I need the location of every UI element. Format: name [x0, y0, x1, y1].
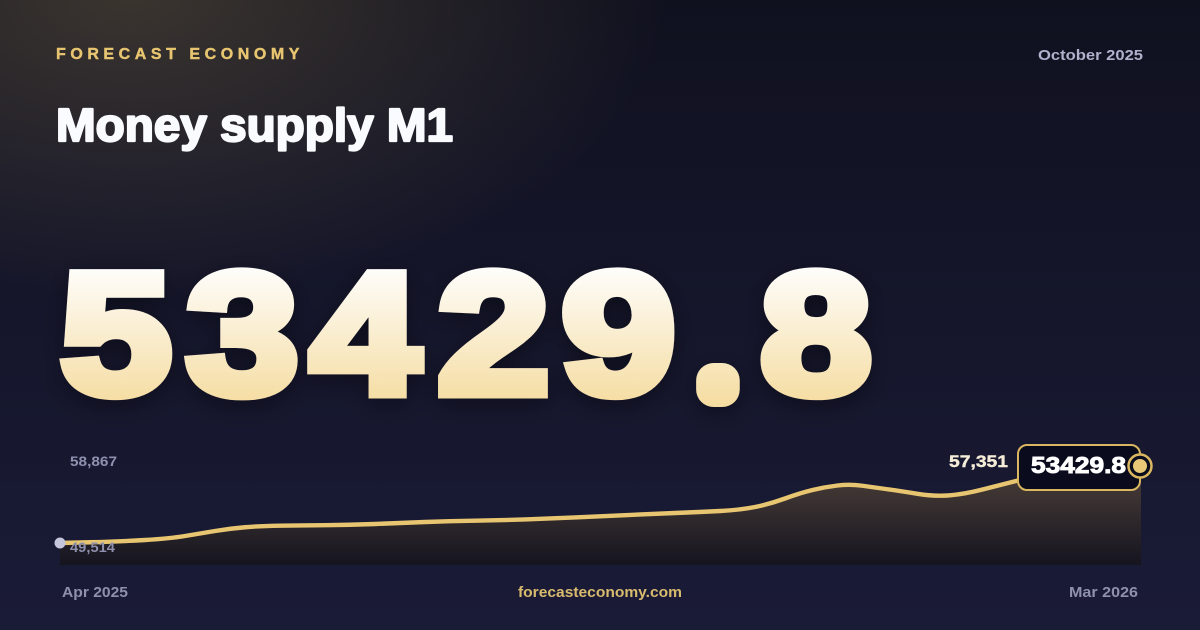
- big value: 9: [562, 238, 676, 430]
- big value: 8: [760, 238, 872, 430]
- sparkline chart: [54, 470, 1141, 565]
- current value callout: [1018, 445, 1140, 490]
- source site: forecasteconomy.com: [518, 584, 682, 601]
- end marker: [1128, 454, 1152, 478]
- big value: 4: [310, 238, 420, 430]
- start date: Apr 2025: [62, 584, 128, 601]
- date: October 2025: [1038, 47, 1143, 64]
- peak label: 57,351: [949, 452, 1008, 471]
- end date: Mar 2026: [1069, 584, 1138, 601]
- axis label: min: 49,514: [70, 540, 116, 555]
- chart area fill: [60, 470, 1141, 565]
- big value: 5: [60, 238, 172, 430]
- start marker: [54, 538, 66, 548]
- big value: .: [710, 336, 726, 402]
- big value: 2: [438, 238, 550, 430]
- axis label: max: 58,867: [70, 454, 117, 469]
- chart line: [60, 480, 1020, 543]
- eyebrow: brand name: FORECAST ECONOMY: [56, 46, 304, 63]
- callout value: 53429.8: [1031, 452, 1126, 478]
- title: Money supply M1: [56, 99, 453, 151]
- big value: 3: [186, 238, 298, 430]
- big value: [60, 238, 872, 430]
